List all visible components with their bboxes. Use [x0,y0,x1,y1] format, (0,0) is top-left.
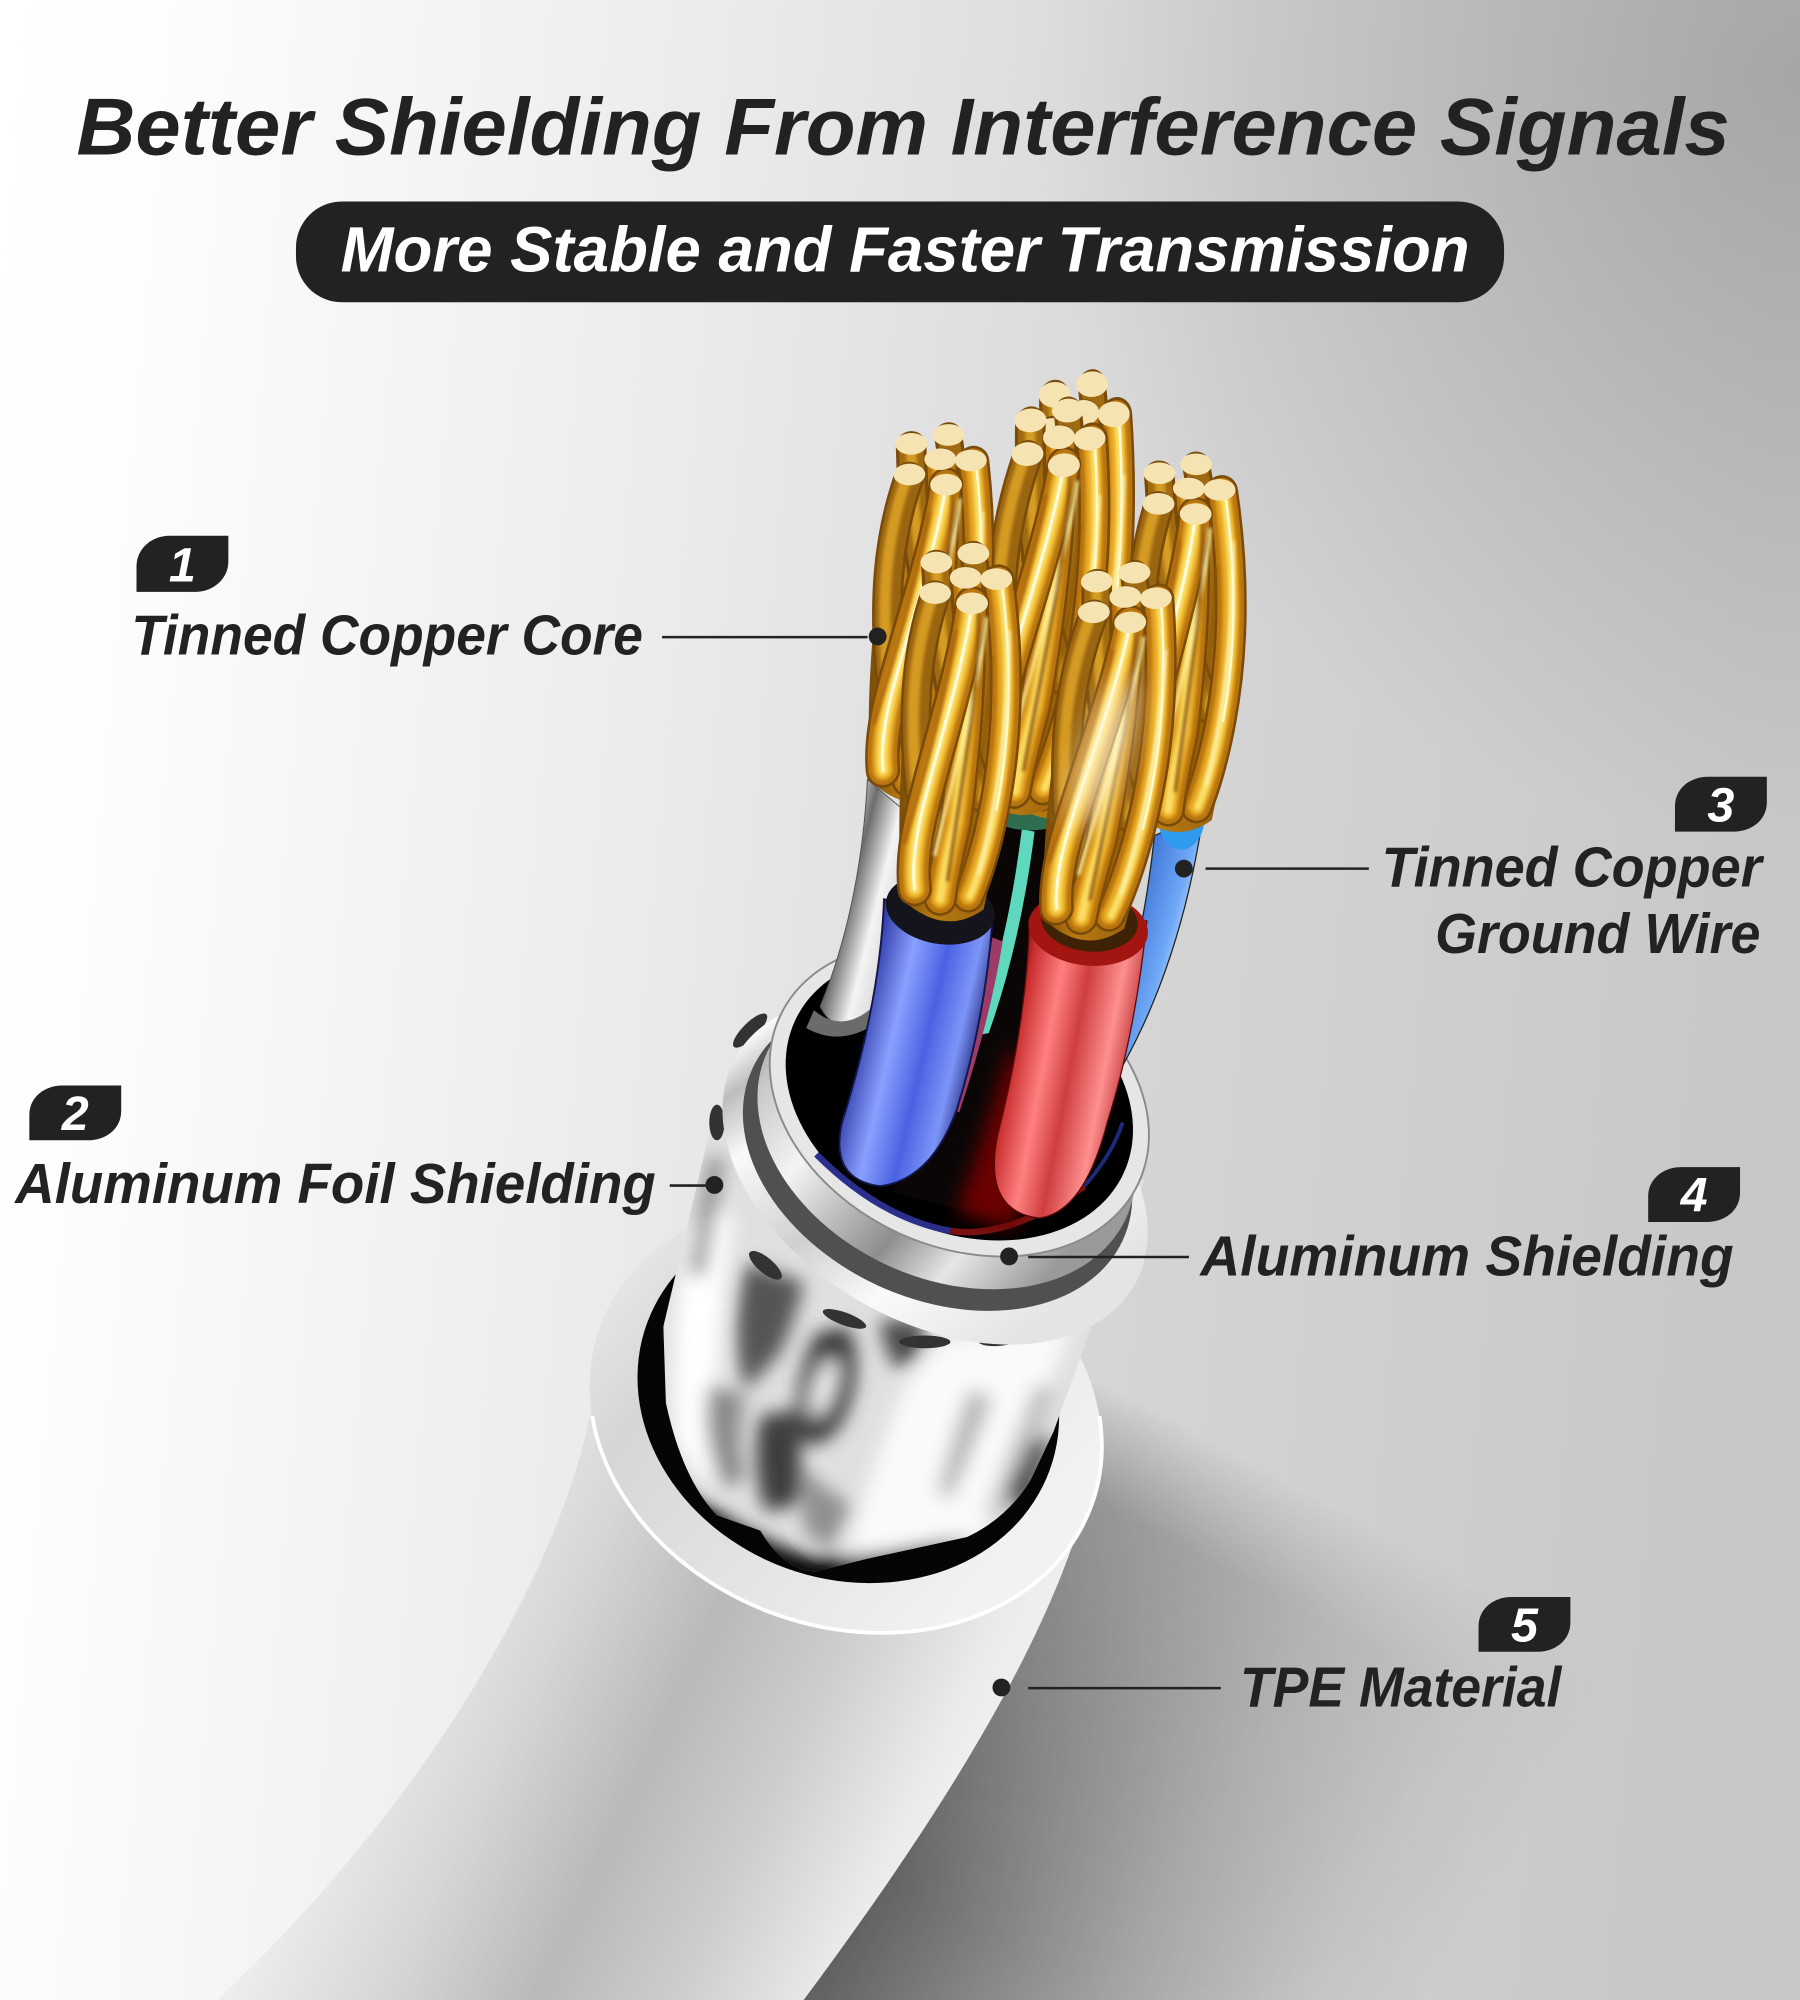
callout 4: aluminum shielding [1000,1167,1740,1288]
light blue wire [1102,816,1203,1079]
callout 4: aluminum shielding: 4 [1680,1169,1708,1223]
subtitle pill [296,202,1504,302]
foil shield [663,1136,1144,1572]
blue wire [839,866,1000,1186]
callout 1: tinned copper core: 1 [169,539,196,593]
callout 5: TPE material: 5 [1511,1599,1539,1653]
callout 5: TPE material: TPE Material [1240,1656,1563,1719]
callout 2: aluminum foil shielding: 2 [61,1087,89,1141]
red wire [994,885,1152,1218]
callout 3: tinned copper ground wire [1175,777,1767,965]
callout 2: aluminum foil shielding: Aluminum Foil Shielding [13,1152,656,1215]
callout 4: aluminum shielding: Aluminum Shielding [1198,1225,1734,1288]
subtitle pill: More Stable and Faster Transmission [341,214,1470,286]
foil flange [661,926,1209,1416]
cable illustration [217,371,1241,2000]
dark core behind wires [893,816,1084,1218]
foil flange edge chips [709,1009,1090,1348]
callout 5: TPE material [992,1597,1570,1719]
teal wire [975,829,1035,1036]
jacket opening [585,1152,1112,1641]
callout 2: aluminum foil shielding [13,1085,723,1215]
copper bundles front [899,543,1175,940]
jacket end ring [590,1266,1104,1635]
copper highlight glow [1063,672,1146,833]
silver ground wire sheath [820,779,918,1027]
copper bundles rear [867,371,1241,832]
dark red reflection [957,1046,1040,1231]
green collar [995,802,1066,830]
magenta reflection [950,938,1003,1112]
cable shadow [804,1392,1468,2000]
callout 3: tinned copper ground wire: Ground Wire [1435,902,1760,965]
callout 1: tinned copper core: Tinned Copper Core [131,603,643,666]
aluminum shield band [692,883,1201,1371]
callout 3: tinned copper ground wire: Tinned Copper [1382,835,1765,898]
callout 3: tinned copper ground wire: 3 [1707,778,1734,832]
callout 1: tinned copper core [131,536,887,666]
title: Better Shielding From Interference Signals [77,82,1730,172]
TPE jacket body [217,1378,1100,2000]
